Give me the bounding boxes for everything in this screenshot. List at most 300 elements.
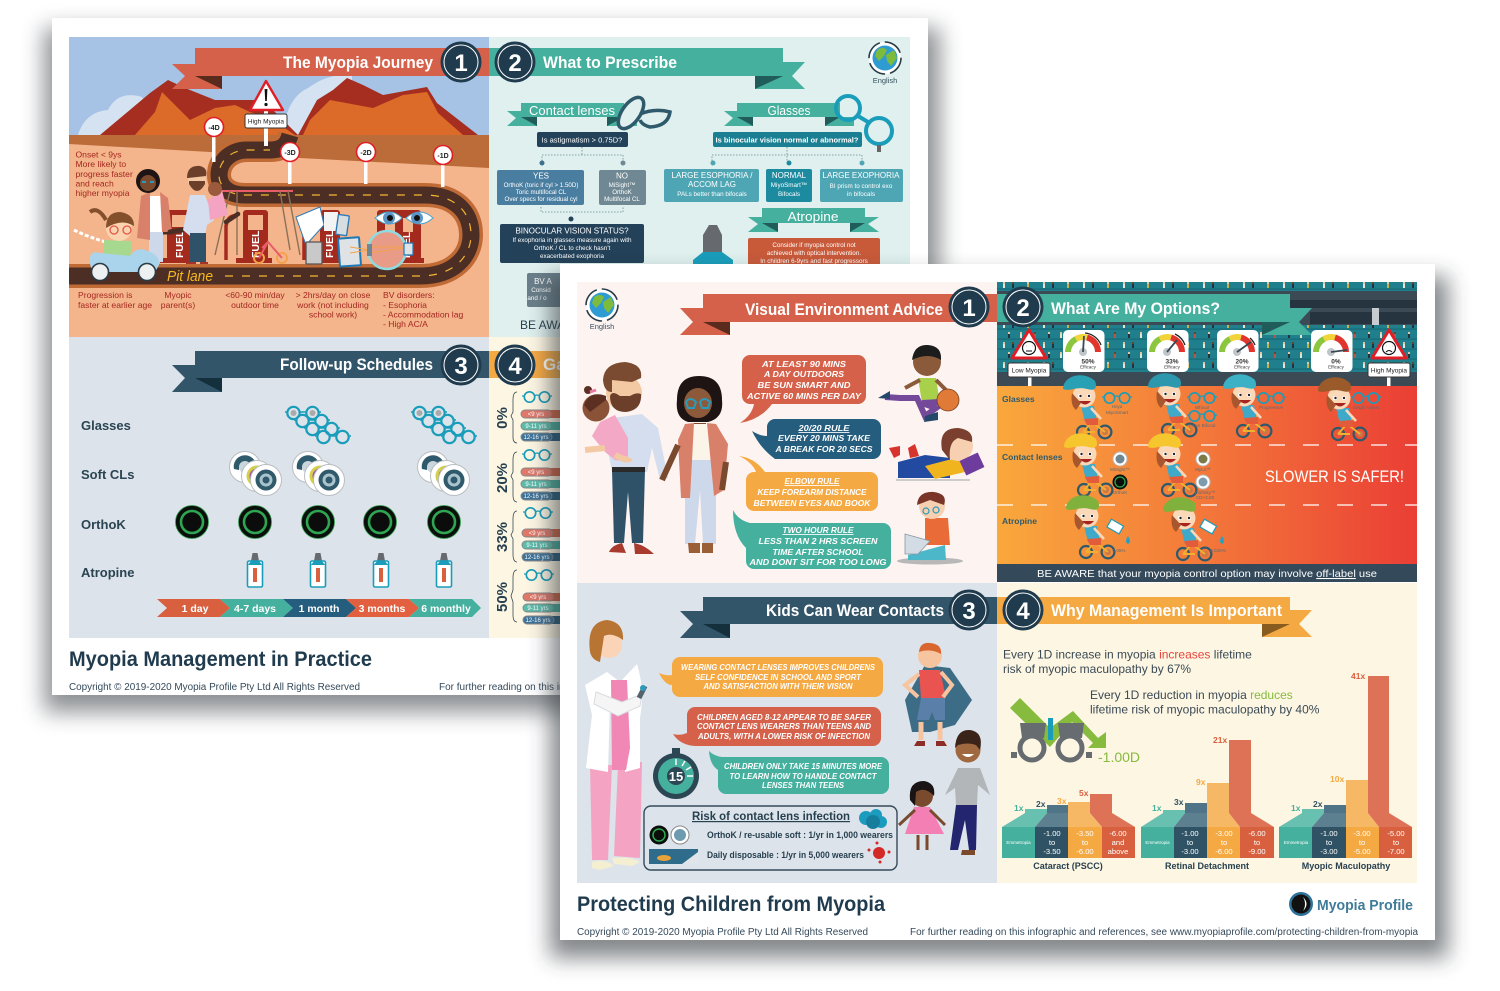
bubble: two hour rule: AND DONT SIT FOR TOO LONG (748, 557, 887, 567)
mother figure (136, 169, 182, 262)
text: onset note: progress faster (76, 169, 133, 179)
child: superhero (905, 643, 972, 746)
chart: Retinal Detachment: to (1254, 838, 1260, 847)
doctor illustration (585, 620, 646, 870)
text: row labels: Atropine (81, 565, 134, 580)
box: large exophoria: in bifocals (847, 191, 875, 198)
father (603, 362, 668, 554)
ribbon: Follow-up Schedules (172, 351, 489, 392)
gauge: 0% efficacy: 0% (1331, 358, 1341, 366)
sheet: Protecting Children from Myopia (560, 264, 1435, 940)
sign: -4D: -4D (208, 125, 220, 132)
bubble: 15 minutes: LENSES THAN TEENS (762, 780, 844, 790)
text: -1.00D: -1.00D (1098, 749, 1140, 765)
box: astigmatism question (537, 132, 628, 147)
text: onset note: More likely to (76, 159, 126, 169)
chart: Myopic Maculopathy: 1x (1291, 803, 1301, 813)
efficacy percentages: 20% (494, 463, 511, 493)
box: normal: NORMAL (772, 171, 807, 180)
text: BV disorders caption: - High AC/A (383, 319, 428, 329)
badges: front sheet numbers: 1 (962, 295, 976, 322)
bubble: confidence: WEARING CONTACT LENSES IMPROVES CHILDRENS (681, 662, 875, 672)
glasses options: Progressive (1259, 405, 1284, 410)
sign: high myopia: High Myopia (1371, 368, 1407, 374)
text: outdoor caption: <60-90 min/day (225, 290, 285, 300)
ribbon: Visual Environment Advice (680, 294, 997, 335)
age pills: <9 yrs (530, 595, 546, 601)
bubble: elbow rule: KEEP FOREARM DISTANCE (758, 487, 867, 497)
icon: germ (868, 842, 890, 864)
box: no: Multifocal CL (604, 196, 640, 203)
box: large esophoria: PALs better than bifocals (677, 191, 747, 198)
chart: Cataract (PSCC): -1.00 (1043, 829, 1061, 838)
icons: soft contact lenses schedule (230, 452, 470, 496)
chart: Retinal Detachment: Retinal Detachment (1165, 861, 1249, 871)
text: onset note: higher myopia (76, 188, 130, 198)
box: binocular vision status: OrthoK / CL to check hasn't (534, 245, 611, 252)
copyright: back sheet: Copyright © 2019-2020 Myopia Profile Pty Ltd All Rights Reserved (69, 682, 360, 693)
mother (662, 376, 728, 553)
bubble: 15 minutes: TO LEARN HOW TO HANDLE CONTACT (730, 771, 877, 781)
chart: Retinal Detachment: to (1221, 838, 1227, 847)
chart: Myopic Maculopathy: 10x (1330, 774, 1344, 784)
icon: 15 minute stopwatch: 15 (669, 769, 683, 784)
chart: Retinal Detachment (1141, 735, 1274, 871)
efficacy percentages: 50% (494, 582, 511, 612)
icons: orthoK schedule (176, 506, 460, 538)
panel 4: gaining control (partly hidden): Ga (543, 355, 566, 374)
chart: Retinal Detachment: 21x (1213, 735, 1227, 745)
ribbon: glasses: Glasses (768, 103, 811, 118)
icon: lenses (650, 826, 689, 844)
child: laptop (897, 492, 963, 564)
bubble: 20/20 rule: EVERY 20 MINS TAKE (778, 433, 870, 443)
badges: back sheet numbers: 1 (454, 50, 468, 77)
age pills: 9-11 yrs (525, 424, 547, 430)
ribbon: What Are My Options? (997, 294, 1312, 335)
text: row labels: Glasses (1002, 394, 1035, 404)
chart: Myopic Maculopathy: to (1326, 838, 1332, 847)
chart: Myopic Maculopathy: -3.00 (1353, 829, 1371, 838)
sign: -2D (356, 142, 376, 184)
text: progression caption: Progression is (78, 290, 132, 300)
ribbon: Kids Can Wear Contacts (680, 597, 997, 638)
bubble: 20/20 rule: A BREAK FOR 20 SECS (774, 444, 873, 454)
icon: trial frame with arrow (1010, 698, 1106, 760)
bubble: confidence: SELF CONFIDENCE IN SCHOOL AND SPORT (695, 672, 862, 682)
chart: Cataract (PSCC): -3.50 (1076, 829, 1094, 838)
text: near work caption: work (not including (296, 300, 369, 310)
fuel pump 2 (226, 210, 272, 263)
box: atropine advice: Consider if myopia control not (772, 242, 856, 249)
chart: Retinal Detachment: Emmetropia (1145, 840, 1170, 845)
ribbon: Kids Can Wear Contacts: Kids Can Wear Contacts (766, 601, 944, 620)
text: reduction statement: Every 1D reduction in myopia reduces (1090, 688, 1293, 702)
fuel pump 4: FUEL (402, 232, 413, 258)
badges: back sheet numbers: 2 (508, 50, 522, 77)
box: yes: Over specs for residual cyl (505, 196, 577, 203)
copyright: front sheet: Copyright © 2019-2020 Myopia Profile Pty Ltd All Rights Reserved (577, 927, 868, 938)
gauge: 33% efficacy: Efficacy (1164, 364, 1181, 370)
text: near work caption: > 2hrs/day on close (296, 290, 371, 300)
sign: -3D (280, 142, 300, 184)
chart: Myopic Maculopathy: -3.00 (1320, 847, 1338, 856)
chart: Cataract (PSCC): and (1112, 838, 1124, 847)
glasses options: Bifocal (1195, 405, 1209, 410)
age pills: 12-16 yrs (524, 555, 550, 561)
chart: Retinal Detachment: -6.00 (1215, 847, 1233, 856)
gauge: 20% efficacy: 20% (1235, 358, 1249, 366)
gauge: 20% efficacy (1217, 330, 1258, 372)
panel 1: Visual Environment Advice (577, 282, 997, 583)
bubble: 15 minutes (709, 751, 889, 794)
text: row labels: Contact lenses (1002, 452, 1063, 462)
icon: atropine bottle (693, 225, 733, 268)
box: binocular vision status: BINOCULAR VISION STATUS? (515, 226, 629, 236)
box: large exophoria (820, 169, 903, 202)
ribbon: Visual Environment Advice: Visual Environment Advice (745, 300, 943, 319)
chart: Myopic Maculopathy: 2x (1313, 799, 1323, 809)
box: large esophoria: ACCOM LAG (688, 180, 736, 189)
further reading: back sheet: For further reading on this infographic (439, 682, 606, 693)
box: yes: YES (533, 172, 549, 180)
bubble: elbow rule: BETWEEN EYES AND BOOK (754, 498, 871, 508)
ribbon: What to Prescribe: What to Prescribe (543, 53, 677, 72)
text: pit lane: Pit lane (167, 268, 213, 285)
chart: Myopic Maculopathy: -1.00 (1320, 829, 1338, 838)
age pills: 9-11 yrs (527, 606, 549, 612)
baby (582, 386, 630, 462)
sign: -1D (434, 146, 452, 187)
child: reading (889, 428, 984, 480)
cyclists row 2 (1064, 433, 1196, 496)
chart: Retinal Detachment: -3.00 (1215, 829, 1233, 838)
chart: Cataract (PSCC) (1002, 788, 1135, 871)
text: BV disorders caption: BV disorders: (383, 290, 435, 300)
text: reduction statement: lifetime risk of myopic maculopathy by 40% (1090, 702, 1320, 716)
ribbon: Why Management Is Important (997, 597, 1312, 637)
icon: eyes (375, 212, 433, 224)
child: boy (945, 730, 990, 855)
badges: front sheet numbers: 4 (1016, 598, 1030, 625)
chart: Cataract (PSCC): to (1082, 838, 1088, 847)
sign: low myopia (1008, 330, 1050, 386)
gauge: 0% efficacy (1311, 330, 1352, 372)
age pills (521, 410, 560, 624)
ribbon: contact lenses (507, 103, 637, 126)
age pills: <9 yrs (529, 531, 545, 537)
contact lens options: MyLo™ (1195, 467, 1211, 472)
icon: globe language: English (873, 76, 897, 85)
efficacy percentages: 0% (494, 407, 511, 429)
gauge: 50% efficacy: Efficacy (1080, 364, 1097, 370)
panel 4: Why Management Is Important (997, 583, 1417, 883)
atropine options: 0.05% (1112, 548, 1126, 553)
chart: Retinal Detachment: 3x (1174, 797, 1184, 807)
text: row labels: OrthoK (81, 517, 126, 532)
box: astigmatism question: Is astigmatism > 0.75D? (542, 136, 622, 144)
chart: Myopic Maculopathy: -7.00 (1387, 847, 1405, 856)
card shadow: back sheet (44, 28, 940, 712)
chart: Cataract (PSCC): to (1049, 838, 1055, 847)
gauge: 33% efficacy (1147, 330, 1188, 372)
cyclists row 3 (1066, 495, 1211, 560)
gauge: 0% efficacy: Efficacy (1328, 364, 1345, 370)
box: large exophoria: LARGE EXOPHORIA (823, 171, 900, 180)
chart: Retinal Detachment: 1x (1152, 803, 1162, 813)
ribbon: The Myopia Journey: The Myopia Journey (283, 53, 433, 72)
text: slower is safer: SLOWER IS SAFER! (1265, 468, 1404, 486)
box: yes: Toric multifocal CL (516, 189, 567, 196)
sign: high myopia warning: High Myopia (248, 118, 284, 126)
bubble: two hour rule: TWO HOUR RULE (782, 525, 854, 535)
panel 2: What Are My Options? (997, 282, 1417, 582)
ribbon: atropine (748, 208, 879, 232)
text: progression caption: faster at earlier age (78, 300, 152, 310)
risk line: orthoK: OrthoK / re-usable soft : 1/yr in 1,000 wearers (707, 830, 893, 840)
box: BV anomalies (527, 273, 587, 307)
ribbon: The Myopia Journey (172, 48, 489, 89)
ribbon: glasses (724, 103, 854, 126)
badges: back sheet numbers (440, 42, 536, 386)
box: no: NO (616, 172, 628, 180)
ribbon: What Are My Options?: What Are My Options? (1051, 299, 1220, 318)
efficacy percentages (494, 407, 511, 612)
chart: Retinal Detachment: -6.00 (1248, 829, 1266, 838)
bubble: outdoors: A DAY OUTDOORS (763, 369, 844, 379)
age pills: 12-16 yrs (523, 494, 549, 500)
text: BV disorders caption: - Accommodation lag (383, 310, 463, 320)
fuel pump 1 (156, 210, 194, 263)
chart: Cataract (PSCC): 2x (1036, 799, 1046, 809)
box: no: OrthoK (612, 189, 633, 196)
logo: Myopia Profile (1289, 892, 1413, 916)
text: increase statement: risk of myopic maculopathy by 67% (1003, 662, 1191, 676)
chart: Myopic Maculopathy: Emmetropia (1284, 840, 1309, 845)
chart: Cataract (PSCC): 5x (1079, 788, 1089, 798)
box: atropine advice: In children 6-9yrs and fast progressors (760, 258, 868, 265)
bubble: elbow rule (739, 456, 878, 511)
box: binocular vision status: exacerbated exophoria (540, 253, 605, 260)
text: parent caption: parent(s) (161, 300, 195, 310)
chart: Cataract (PSCC): Cataract (PSCC) (1033, 861, 1103, 871)
bubble: outdoors: BE SUN SMART AND (758, 380, 850, 390)
text: row labels: Soft CLs (81, 467, 134, 482)
gauge: 50% efficacy: 50% (1081, 358, 1095, 366)
sign: -3D: -3D (284, 150, 296, 157)
ribbon: What to Prescribe (489, 48, 805, 89)
sign: high myopia warning (245, 81, 287, 146)
age pills: 12-16 yrs (523, 435, 549, 441)
chart: Cataract (PSCC): -6.00 (1109, 829, 1127, 838)
badges: front sheet numbers: 3 (962, 598, 976, 625)
bubble: safer: ADULTS, WITH A LOWER RISK OF INFECTION (697, 731, 871, 741)
icon: daily disposable box (649, 849, 698, 864)
box: BV anomalies: and / o (527, 295, 547, 302)
chart: Cataract (PSCC): above (1108, 847, 1128, 856)
race track (997, 386, 1417, 564)
text: onset note: and reach (76, 178, 114, 188)
girl in toy car (74, 210, 159, 280)
box: normal: MiyoSmart™ (771, 182, 807, 189)
text: BV disorders caption: - Esophoria (383, 300, 427, 310)
timeline chevrons: 1 month (299, 603, 339, 615)
bubble: 15 minutes: CHILDREN ONLY TAKE 15 MINUTES MORE (724, 761, 882, 771)
box: binocular vision question: Is binocular vision normal or abnormal? (716, 136, 859, 144)
text: parent caption: Myopic (164, 290, 192, 300)
glasses options: Single Vision (1353, 405, 1380, 410)
badges: front sheet numbers (948, 286, 1044, 630)
bubble: elbow rule: ELBOW RULE (784, 476, 840, 486)
panel 1: The Myopia Journey (69, 37, 489, 337)
icon: big teal glasses (836, 96, 892, 152)
box: binocular vision status: If exophoria in glasses measure again with (512, 237, 632, 244)
text: be aware: BE AWARE (520, 318, 582, 332)
bubble: two hour rule: LESS THAN 2 HRS SCREEN (758, 536, 878, 546)
glasses options: Hoya (1112, 404, 1123, 409)
box: no: MiSight™ (609, 182, 635, 189)
fuel label: pump 3: FUEL (324, 230, 336, 258)
panel 4: gaining control (partly hidden) (489, 337, 566, 638)
chart: Myopic Maculopathy: Myopic Maculopathy (1302, 861, 1390, 871)
sign: high myopia (1368, 330, 1410, 386)
chart: Retinal Detachment: -1.00 (1181, 829, 1199, 838)
box: atropine advice (748, 238, 880, 268)
timeline chevrons: 6 monthly (421, 603, 471, 615)
father and baby figure (183, 166, 228, 264)
chart: Cataract (PSCC): -6.00 (1076, 847, 1094, 856)
risk line: daily: Daily disposable : 1/yr in 5,000 wearers (707, 850, 864, 860)
age pills: 9-11 yrs (526, 543, 548, 549)
box: BV anomalies: Consid (531, 287, 551, 294)
bubble: confidence (659, 657, 883, 697)
glasses icons (522, 392, 554, 580)
icon: bike (254, 242, 287, 263)
bubble: outdoors: ACTIVE 60 MINS PER DAY (746, 391, 862, 401)
text: onset note: Onset < 9ys (76, 150, 122, 160)
mountains (100, 78, 478, 135)
chart: Myopic Maculopathy: 41x (1351, 671, 1365, 681)
bubble: outdoors: AT LEAST 90 MINS (761, 359, 846, 369)
bubble: confidence: AND SATISFACTION WITH THEIR VISION (703, 681, 853, 691)
bubble: safer (673, 707, 881, 746)
icons: glasses schedule (285, 407, 477, 443)
panel 3: Kids Can Wear Contacts (577, 583, 997, 883)
chart: Myopic Maculopathy: to (1359, 838, 1365, 847)
chart: Cataract (PSCC): -3.50 (1043, 847, 1061, 856)
gauge: 50% efficacy (1063, 330, 1104, 372)
glasses options: Prism Bifocal (1189, 423, 1215, 428)
bubble: 20/20 rule (752, 419, 881, 459)
title: Myopia Management in Practice: Myopia Management in Practice (69, 648, 372, 671)
sheet: Myopia Management in Practice (52, 18, 928, 695)
cyclists row 1 (1063, 373, 1366, 440)
gauge: 20% efficacy: Efficacy (1234, 364, 1251, 370)
box: binocular vision question (713, 132, 862, 147)
timeline chevrons: 3 months (359, 603, 405, 615)
icon: 15 minute stopwatch (653, 748, 699, 799)
bar: off-label note: BE AWARE that your myopia control option may involve off-label use (1037, 568, 1377, 580)
card shadow: front sheet (550, 276, 1448, 958)
chart: Retinal Detachment: -9.00 (1248, 847, 1266, 856)
sign: -2D: -2D (360, 150, 372, 157)
box: large esophoria: LARGE ESOPHORIA / (672, 171, 753, 180)
child: girl in pink (899, 781, 945, 850)
box: binocular vision status (500, 224, 644, 263)
box: large exophoria: BI prism to control exo (830, 183, 893, 190)
badges: back sheet numbers: 4 (508, 353, 522, 380)
contact lens options: OrthoK (1113, 490, 1128, 495)
fuel pump 1: FUEL (174, 230, 186, 258)
icons: atropine schedule (248, 553, 452, 587)
icon: contact lens pair (613, 93, 670, 133)
chart: Myopic Maculopathy: -5.00 (1387, 829, 1405, 838)
glasses options: MiyoSmart (1106, 410, 1129, 415)
box: atropine advice: achieved with optical intervention. (767, 250, 861, 257)
further reading: front sheet: For further reading on this infographic and references, see www.myopiaprofile.com/protecting-children-from-myopia (910, 927, 1418, 938)
atropine options (1107, 519, 1226, 553)
bubble: safer: CONTACT LENS WEARERS THAN TEENS AND (697, 721, 871, 731)
ribbon: Follow-up Schedules: Follow-up Schedules (280, 355, 433, 374)
timeline chevrons: 1 day (182, 603, 209, 615)
sign: -4D (204, 118, 224, 162)
text: row labels: Glasses (81, 418, 131, 433)
fuel pump 3 (304, 210, 344, 263)
age pills: <9 yrs (528, 412, 544, 418)
timeline chevrons: 4-7 days (234, 603, 276, 615)
box: yes: OrthoK (toric if cyl > 1.50D) (504, 182, 578, 189)
badges: back sheet numbers: 3 (454, 353, 468, 380)
timeline chevrons (157, 599, 481, 617)
bubble: 20/20 rule: 20/20 RULE (797, 423, 850, 433)
text: outdoor caption: outdoor time (231, 300, 279, 310)
chart: Cataract (PSCC): 3x (1057, 796, 1067, 806)
risk of infection box (644, 806, 897, 870)
age pills: 12-16 yrs (525, 618, 551, 624)
chart: Myopic Maculopathy (1279, 671, 1412, 871)
chart: Myopic Maculopathy: to (1393, 838, 1399, 847)
bubble: safer: CHILDREN AGED 8-12 APPEAR TO BE SAFER (697, 712, 872, 722)
icon: eye cross section (350, 231, 413, 269)
glasses options (1102, 393, 1381, 428)
bubble: two hour rule: TIME AFTER SCHOOL (772, 547, 864, 557)
sign: -1D: -1D (437, 153, 449, 160)
box: normal (766, 169, 812, 202)
contact lens options (1110, 452, 1215, 500)
contact lens options: MiSight™ (1110, 467, 1130, 472)
logo: Myopia Profile: Myopia Profile (1317, 897, 1413, 914)
contact lens options: CD+2.50 (1196, 495, 1215, 500)
bar: off-label note (997, 564, 1417, 582)
atropine options: 0.025% (1210, 548, 1226, 553)
box: normal: Bifocals (778, 191, 800, 198)
chart: Retinal Detachment: -3.00 (1181, 847, 1199, 856)
ribbon: atropine: Atropine (788, 209, 838, 224)
box: yes (497, 170, 584, 205)
chart: Retinal Detachment: 9x (1196, 777, 1206, 787)
chart: Myopic Maculopathy: -5.00 (1353, 847, 1371, 856)
badges: front sheet numbers: 2 (1016, 295, 1030, 322)
swing set (215, 191, 300, 255)
efficacy percentages: 33% (494, 522, 511, 552)
box: large esophoria (664, 169, 759, 202)
bubble: outdoors (740, 355, 866, 423)
text: increase statement: Every 1D increase in myopia increases lifetime (1003, 648, 1252, 662)
age pills: 9-11 yrs (525, 482, 547, 488)
child: basketball (878, 345, 959, 422)
box: no (599, 170, 646, 205)
ribbon: Why Management Is Important: Why Management Is Important (1051, 601, 1282, 620)
